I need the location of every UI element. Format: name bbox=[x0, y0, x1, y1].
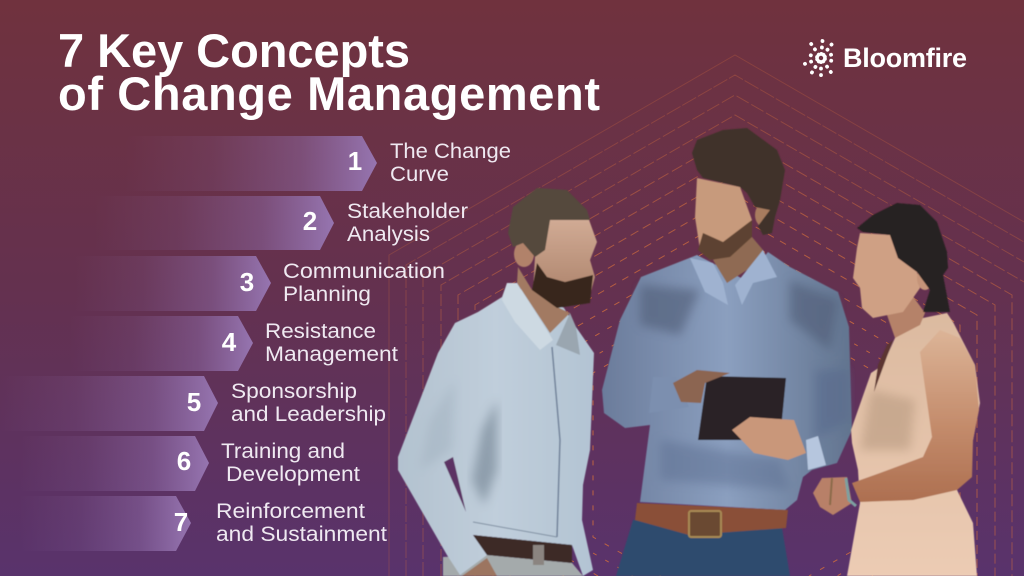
item 3: 3 bbox=[240, 267, 254, 297]
hexagon line pattern bbox=[389, 55, 1024, 576]
item 6: Training and bbox=[221, 440, 345, 463]
item 2: Analysis bbox=[347, 223, 430, 246]
item 2 bbox=[95, 196, 468, 250]
wordmark: Bloomfire bbox=[843, 43, 967, 73]
item 7: Reinforcement bbox=[216, 500, 365, 523]
item 5: Sponsorship bbox=[231, 380, 357, 403]
ribbon list bbox=[0, 136, 511, 551]
item 4: Resistance bbox=[265, 320, 376, 343]
item 5: 5 bbox=[187, 387, 201, 417]
item 1: The Change bbox=[390, 140, 511, 163]
photo: three colleagues bbox=[398, 128, 980, 576]
icon: burst of dots bbox=[802, 38, 837, 78]
item 5 bbox=[0, 376, 386, 431]
item 3 bbox=[75, 256, 445, 311]
item 6: Development bbox=[226, 463, 360, 486]
item 6 bbox=[20, 436, 360, 491]
item 6: 6 bbox=[177, 446, 191, 476]
item 1 bbox=[125, 136, 511, 191]
item 4: Management bbox=[265, 343, 398, 366]
title bbox=[58, 24, 600, 120]
title: 7 Key Concepts bbox=[58, 24, 410, 77]
person: woman bbox=[813, 203, 980, 576]
item 4 bbox=[70, 316, 398, 371]
item 2: Stakeholder bbox=[347, 200, 468, 223]
person: middle man bbox=[602, 128, 852, 576]
item 2: 2 bbox=[303, 206, 317, 236]
person: left man bbox=[398, 188, 597, 576]
item 1: Curve bbox=[390, 163, 449, 186]
item 3: Planning bbox=[283, 283, 371, 306]
logo: Bloomfire bbox=[802, 38, 967, 78]
item 4: 4 bbox=[222, 327, 237, 357]
item 1: 1 bbox=[348, 146, 362, 176]
item 7: 7 bbox=[174, 507, 188, 537]
item 7 bbox=[20, 496, 387, 551]
title: of Change Management bbox=[58, 67, 600, 120]
item 7: and Sustainment bbox=[216, 523, 387, 546]
item 3: Communication bbox=[283, 260, 445, 283]
item 5: and Leadership bbox=[231, 403, 386, 426]
